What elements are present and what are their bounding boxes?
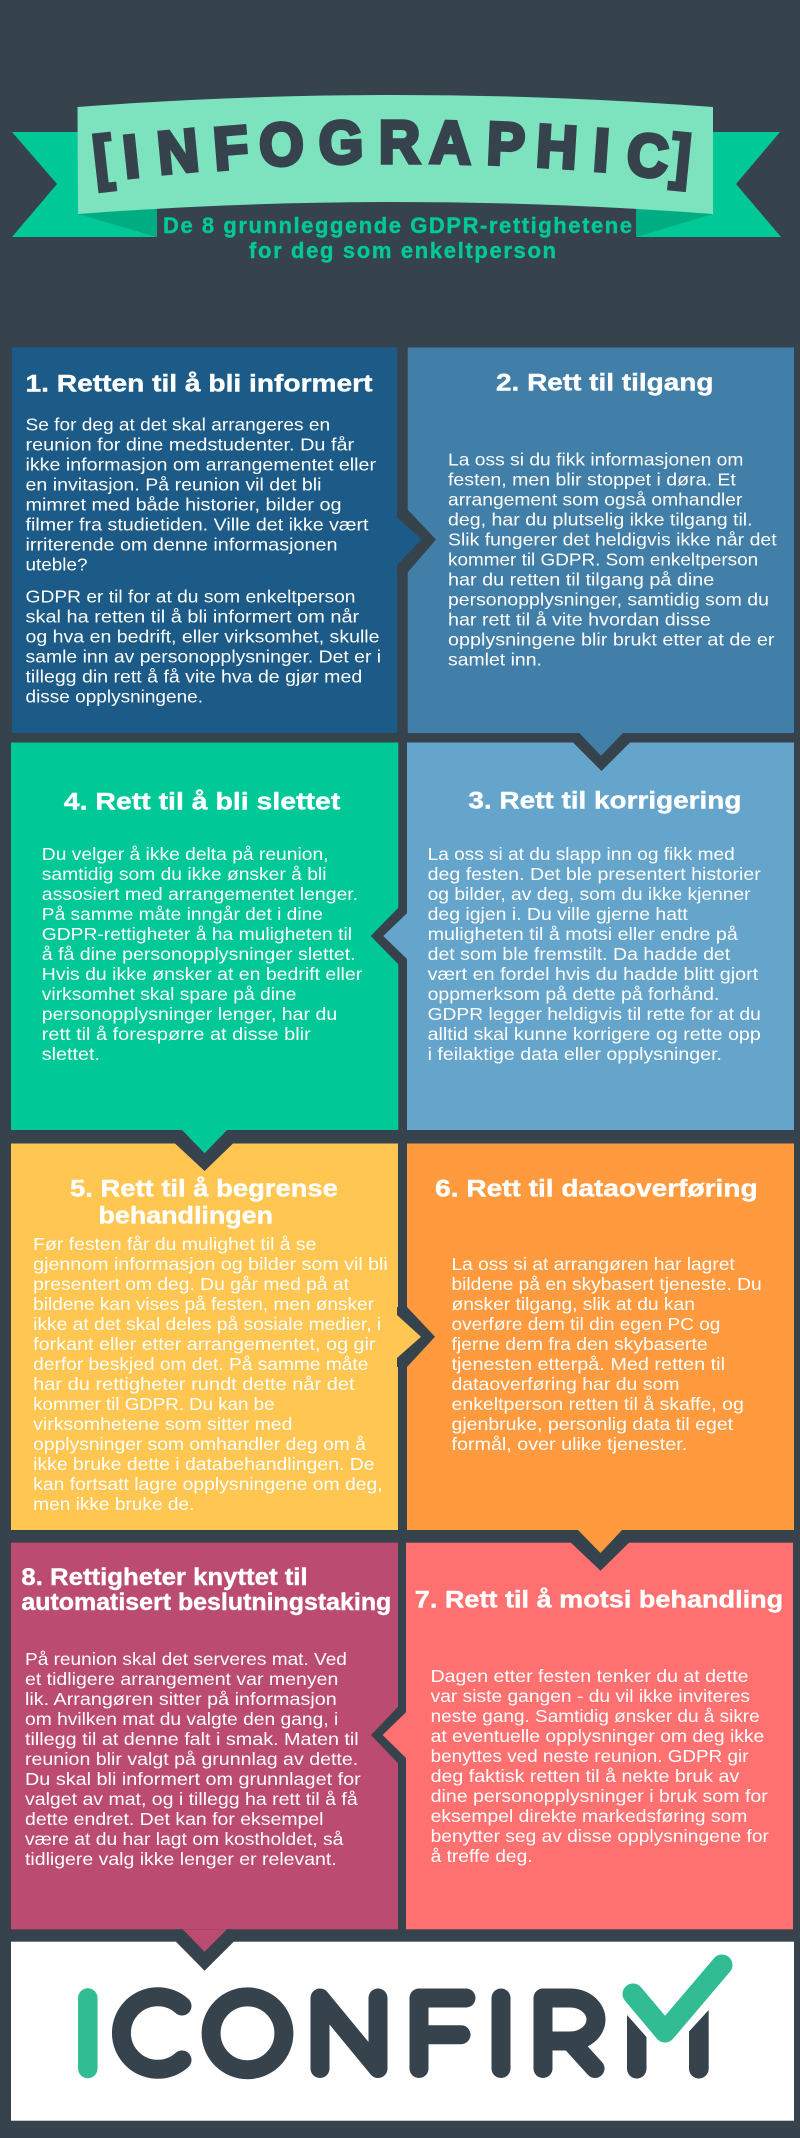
text block 7: neste gang. Samtidig ønsker du å sikre	[431, 1706, 760, 1726]
text block 2: kommer til GDPR. Som enkeltperson	[448, 549, 758, 569]
heading 6: 6. Rett til dataoverføring	[435, 1176, 758, 1203]
panel 5 background	[11, 1144, 398, 1530]
text block 5: kan fortsatt lagre opplysningene om deg,	[33, 1474, 383, 1494]
title: [INFOGRAPHIC]: G	[318, 109, 364, 177]
panel 1 background	[12, 348, 397, 733]
panel 5: rett til å begrense behandlingen	[11, 1144, 398, 1530]
text block 6: gjenbruke, personlig data til eget	[452, 1414, 733, 1434]
text block 1: reunion for dine medstudenter. Du får	[26, 435, 354, 455]
text block 2: festen, men blir stoppet i døra. Et	[448, 469, 736, 489]
ribbon main	[78, 95, 713, 214]
arrow: 8 to logo	[176, 1929, 234, 1971]
text block 3: La oss si at du slapp inn og fikk med	[428, 844, 735, 864]
text block 1: ikke informasjon om arrangementet eller	[26, 455, 376, 475]
logo letter M	[627, 2010, 709, 2078]
text block 2	[448, 449, 777, 669]
text block 7: deg faktisk retten til å nekte bruk av	[431, 1766, 740, 1786]
logo letter N	[320, 1998, 378, 2068]
arrow: 3 to 4	[371, 908, 408, 964]
banner header	[12, 95, 781, 263]
text block 7: eksempel direkte markedsføring som	[431, 1806, 747, 1826]
text block 8	[25, 1649, 361, 1869]
text block 4: personopplysninger lenger, har du	[42, 1004, 337, 1024]
text block 1: disse opplysningene.	[26, 687, 203, 707]
heading 7: 7. Rett til å motsi behandling	[415, 1586, 783, 1613]
text block 8: dette endret. Det kan for eksempel	[25, 1809, 324, 1829]
text block 2: Slik fungerer det heldigvis ikke når det	[448, 529, 777, 549]
text block 1: en invitasjon. På reunion vil det bli	[26, 475, 322, 495]
subtitle: for deg som enkeltperson	[249, 238, 556, 263]
logo: ICONFIRM	[88, 1965, 722, 2078]
text block 4: slettet.	[42, 1044, 100, 1064]
heading 5: 5. Rett til å begrense	[70, 1176, 338, 1203]
text block 4: samtidig som du ikke ønsker å bli	[42, 864, 327, 884]
text block 6: ønsker tilgang, slik at du kan	[452, 1294, 695, 1314]
text block 5: opplysninger som omhandler deg om å	[33, 1434, 366, 1454]
text block 1: Se for deg at det skal arrangeres en	[26, 415, 330, 435]
heading 8: automatisert beslutningstaking	[21, 1589, 391, 1616]
panel 3: rett til korrigering	[407, 742, 794, 1130]
logo checkmark	[633, 1965, 722, 2032]
heading 2: 2. Rett til tilgang	[496, 370, 713, 397]
text block 6: tjenesten etterpå. Med retten til	[452, 1354, 725, 1374]
text block 7: benyttes ved neste reunion. GDPR gir	[431, 1746, 749, 1766]
text block 4: På samme måte inngår det i dine	[42, 904, 323, 924]
arrow: 1 to 2	[397, 510, 436, 572]
text block 3: oppmerksom på dette på forhånd.	[428, 984, 719, 1004]
text block 5: har du rettigheter rundt dette når det	[33, 1374, 355, 1394]
text block 5: derfor beskjed om det. På samme måte	[33, 1354, 368, 1374]
heading 5: behandlingen	[98, 1202, 273, 1229]
text block 5: gjennom informasjon og bilder som vil bli	[33, 1254, 388, 1274]
text block 1: samle inn av personopplysninger. Det er i	[26, 647, 381, 667]
text block 5: Før festen får du mulighet til å se	[33, 1234, 316, 1254]
text block 6: enkeltperson retten til å skaffe, og	[452, 1394, 744, 1414]
text block 2: har du retten til tilgang på dine	[448, 569, 714, 589]
text block 1: og hva en bedrift, eller virksomhet, skulle	[26, 627, 380, 647]
text block 4: Du velger å ikke delta på reunion,	[42, 844, 329, 864]
text block 5: bildene kan vises på festen, men ønsker	[33, 1294, 374, 1314]
title: [INFOGRAPHIC]: ]	[668, 123, 694, 191]
text block 7: å treffe deg.	[431, 1846, 533, 1866]
text block 8: være at du har lagt om kostholdet, så	[25, 1829, 344, 1849]
arrow: 6 to 7	[571, 1530, 629, 1571]
text block 2: deg, har du plutselig ikke tilgang til.	[448, 509, 753, 529]
panel 8: rettigheter knyttet til automatisert beslutningstaking	[11, 1543, 398, 1929]
title: [INFOGRAPHIC]: I	[120, 123, 143, 191]
text block 7: Dagen etter festen tenker du at dette	[431, 1666, 748, 1686]
subtitle	[163, 213, 632, 263]
text block 1: GDPR er til for at du som enkeltperson	[26, 587, 356, 607]
title: [INFOGRAPHIC]: F	[211, 114, 251, 183]
logo letter C	[121, 1997, 182, 2069]
text block 5: men ikke bruke de.	[33, 1494, 194, 1514]
panel 4 background	[11, 742, 398, 1130]
text block 4: rett til å forespørre at disse blir	[42, 1024, 311, 1044]
title: [INFOGRAPHIC]: A	[429, 109, 472, 177]
text block 6: overføre dem til din egen PC og	[452, 1314, 720, 1334]
text block 7: dine personopplysninger i bruk som for	[431, 1786, 768, 1806]
text block 3: alltid skal kunne korrigere og rette opp	[428, 1024, 761, 1044]
text block 1: tillegg din rett å få vite hva de gjør med	[26, 667, 362, 687]
heading 8	[21, 1564, 391, 1616]
subtitle backing	[157, 207, 636, 247]
text block 1: mimret med både historier, bilder og	[26, 495, 342, 515]
ribbon left tail	[12, 132, 157, 237]
text block 6: fjerne dem fra den skybaserte	[452, 1334, 708, 1354]
text block 2: La oss si du fikk informasjonen om	[448, 449, 743, 469]
text block 5: forkant eller etter arrangementet, og gir	[33, 1334, 376, 1354]
title: [INFOGRAPHIC]: N	[154, 117, 202, 187]
text block 6: dataoverføring har du som	[452, 1374, 680, 1394]
title: [INFOGRAPHIC]: O	[258, 111, 305, 179]
heading 8: 8. Rettigheter knyttet til	[21, 1564, 308, 1591]
text block 8: lik. Arrangøren sitter på informasjon	[25, 1689, 337, 1709]
panel 6 background	[407, 1144, 794, 1530]
text block 4: GDPR-rettigheter å ha muligheten til	[42, 924, 352, 944]
text block 2: arrangement som også omhandler	[448, 489, 743, 509]
text block 5: virksomhetene som sitter med	[33, 1414, 292, 1434]
text block 7: at eventuelle opplysninger om deg ikke	[431, 1726, 764, 1746]
text block 1: uteble?	[26, 555, 88, 575]
logo letter I green	[78, 1998, 98, 2068]
title: [INFOGRAPHIC]: [	[90, 124, 116, 192]
text block 2: opplysningene blir brukt etter at de er	[448, 629, 775, 649]
text block 7: var siste gangen - du vil ikke inviteres	[431, 1686, 750, 1706]
text block 3: vært en fordel hvis du hadde blitt gjort	[428, 964, 758, 984]
text block 4: virksomhet skal spare på dine	[42, 984, 296, 1004]
panel: logo background	[11, 1942, 794, 2121]
text block 3: muligheten til å motsi eller endre på	[428, 924, 738, 944]
text block 5: kommer til GDPR. Du kan be	[33, 1394, 275, 1414]
text block 6: bildene på en skybasert tjeneste. Du	[452, 1274, 762, 1294]
subtitle: De 8 grunnleggende GDPR-rettighetene	[163, 213, 632, 238]
title: [INFOGRAPHIC]: C	[624, 121, 671, 191]
logo letter O	[211, 1997, 284, 2070]
text block 2: personopplysninger, samtidig som du	[448, 589, 769, 609]
text block 1: filmer fra studietiden. Ville det ikke vært	[26, 515, 369, 535]
heading 5	[70, 1176, 338, 1229]
panel 3 background	[407, 742, 794, 1130]
text block 2: har rett til å vite hvordan disse	[448, 609, 711, 629]
text block 3: deg festen. Det ble presentert historier	[428, 864, 761, 884]
ribbon right tail	[636, 132, 781, 237]
text block 5: presentert om deg. Du går med på at	[33, 1274, 349, 1294]
logo letter R	[543, 1998, 596, 2068]
panel 1: retten til å bli informert	[12, 348, 397, 733]
text block 2: samlet inn.	[448, 649, 542, 669]
title: [INFOGRAPHIC]: P	[485, 110, 526, 179]
text block 8: Du skal bli informert om grunnlaget for	[25, 1769, 361, 1789]
arrow: 2 to 3	[573, 733, 630, 771]
panel 7 background	[406, 1543, 793, 1929]
text block 6: La oss si at arrangøren har lagret	[452, 1254, 735, 1274]
logo letter I	[492, 1998, 510, 2068]
text block 8: et tidligere arrangement var menyen	[25, 1669, 338, 1689]
text block 7	[431, 1666, 769, 1866]
text block 3: GDPR legger heldigvis til rette for at du	[428, 1004, 761, 1024]
text block 3: det som ble fremstilt. Da hadde det	[428, 944, 730, 964]
arrow: 5 to 6	[397, 1307, 435, 1367]
text block 4: Hvis du ikke ønsker at en bedrift eller	[42, 964, 362, 984]
text block 8: tillegg til at denne falt i smak. Maten til	[25, 1729, 359, 1749]
panel 8 background	[11, 1543, 398, 1929]
text block 8: tidligere valg ikke lenger er relevant.	[25, 1849, 337, 1869]
text block 3	[428, 844, 761, 1064]
title: [INFOGRAPHIC]: R	[379, 110, 420, 176]
text block 1: skal ha retten til å bli informert om når	[26, 607, 359, 627]
arrow: 7 to 8	[371, 1707, 407, 1763]
text block 8: På reunion skal det serveres mat. Ved	[25, 1649, 347, 1669]
panel 2: rett til tilgang	[408, 348, 794, 733]
heading 3: 3. Rett til korrigering	[468, 787, 741, 814]
text block 8: reunion blir valgt på grunnlag av dette.	[25, 1749, 358, 1769]
text block 5: ikke at det skal deles på sosiale medier, i	[33, 1314, 381, 1334]
title: [INFOGRAPHIC]: H	[534, 113, 579, 182]
text block 8: valget av mat, og i tillegg ha rett til å få	[25, 1789, 358, 1809]
text block 7: benytter seg av disse opplysningene for	[431, 1826, 769, 1846]
title: [INFOGRAPHIC]	[90, 109, 694, 192]
text block 3: deg igjen i. Du ville gjerne hatt	[428, 904, 688, 924]
text block 4	[42, 844, 362, 1064]
text block 4: å få dine personopplysninger slettet.	[42, 944, 356, 964]
panel 6: rett til dataoverføring	[407, 1144, 794, 1530]
panel 4: rett til å bli slettet	[11, 742, 398, 1130]
text block 3: i feilaktige data eller opplysninger.	[428, 1044, 722, 1064]
heading 1: 1. Retten til å bli informert	[26, 371, 372, 398]
text block 3: og bilder, av deg, som du ikke kjenner	[428, 884, 751, 904]
panel 2 background	[408, 348, 794, 733]
text block 6	[452, 1254, 762, 1454]
text block 1: irriterende om denne informasjonen	[26, 535, 338, 555]
text block 5: ikke bruke dette i databehandlingen. De	[33, 1454, 374, 1474]
arrow: 4 to 5	[175, 1130, 233, 1171]
text block 6: formål, over ulike tjenester.	[452, 1434, 687, 1454]
heading 4: 4. Rett til å bli slettet	[64, 788, 340, 815]
text block 4: assosiert med arrangementet lenger.	[42, 884, 358, 904]
logo letter F	[419, 1998, 466, 2068]
text block 5	[33, 1234, 388, 1514]
text block 8: om hvilken mat du valgte den gang, i	[25, 1709, 338, 1729]
title: [INFOGRAPHIC]: I	[591, 117, 612, 185]
text block 1	[26, 415, 381, 707]
panel 7: rett til å motsi behandling	[406, 1543, 793, 1929]
